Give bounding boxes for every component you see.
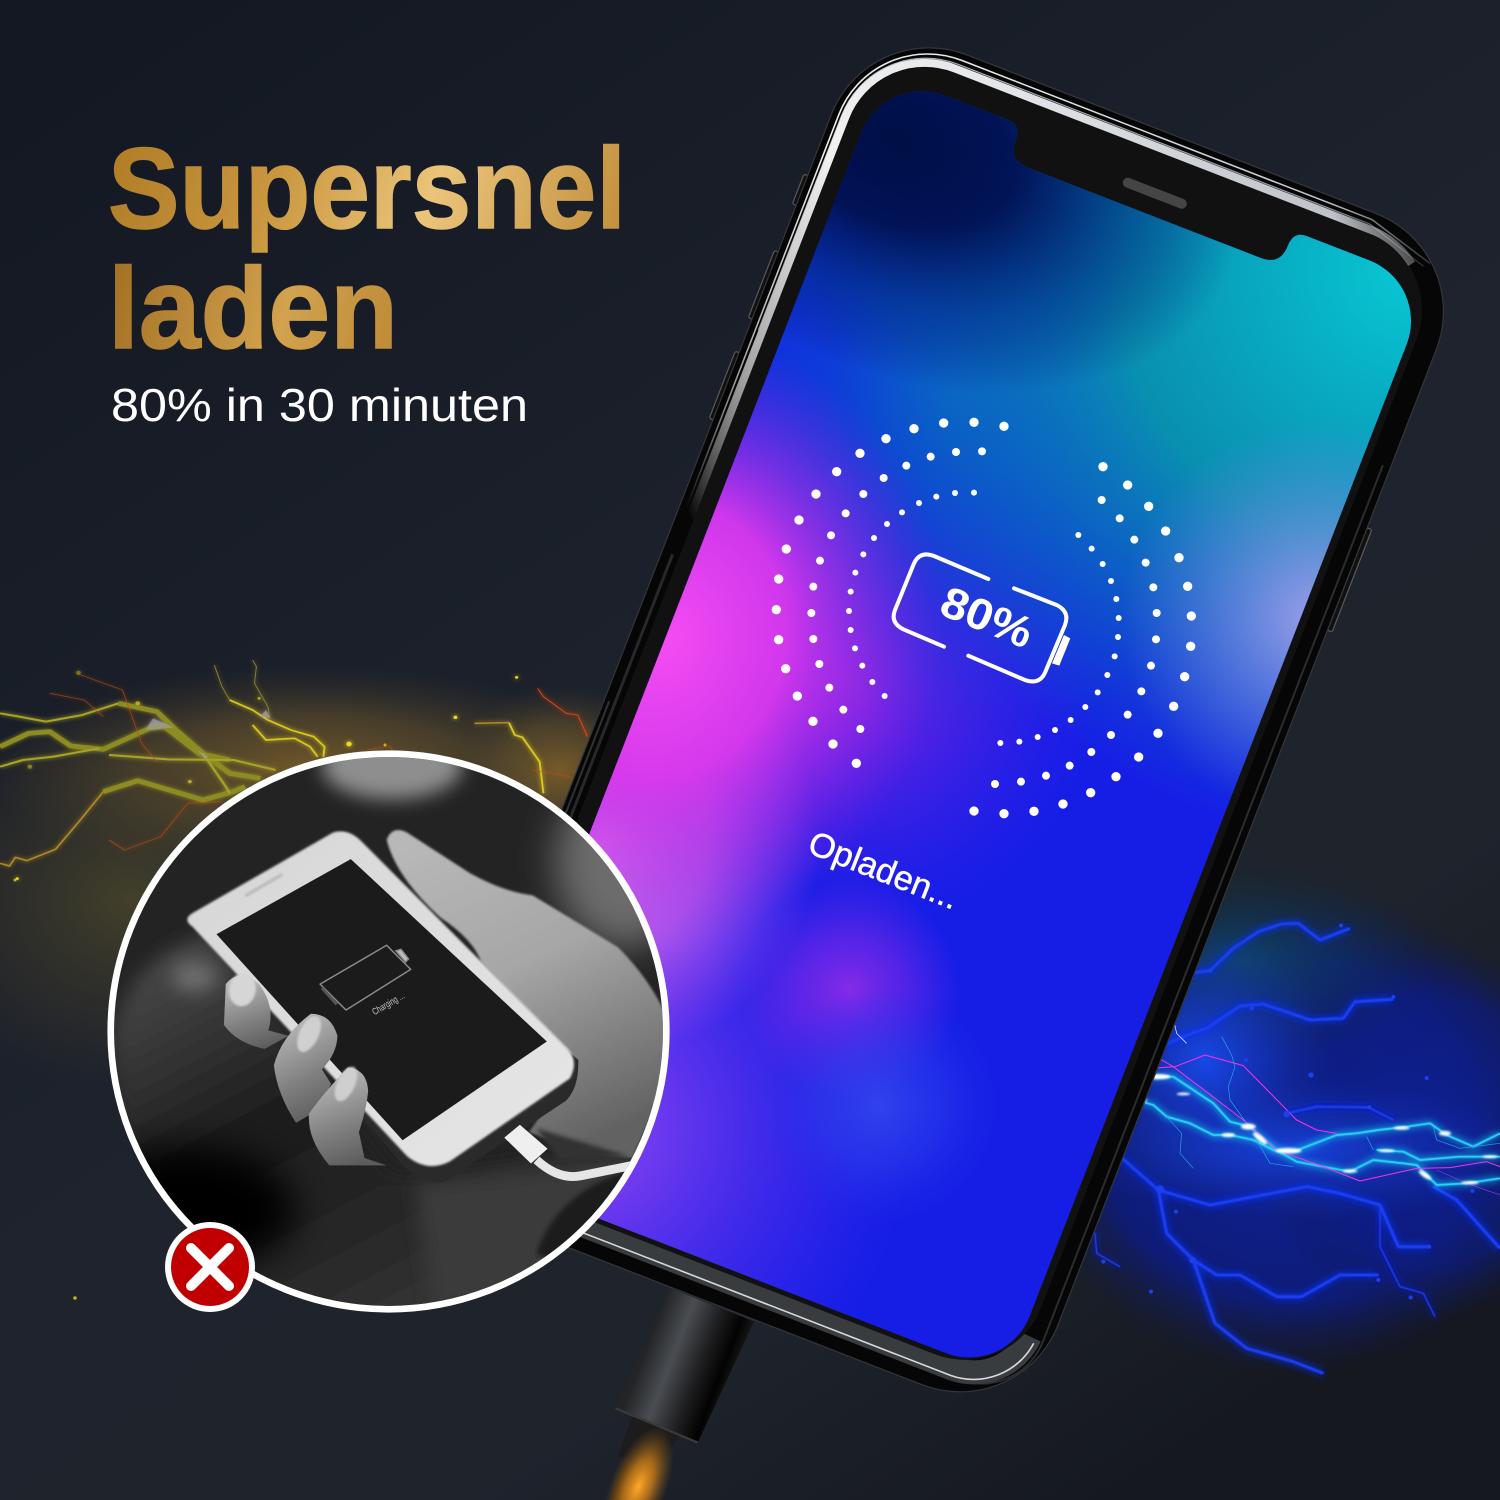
- fingers: [224, 971, 387, 1165]
- photo of phone in hand: [114, 757, 663, 1306]
- phone thin edge highlights: [426, 25, 1464, 1403]
- black case edge: [363, 1051, 578, 1170]
- small charging text: Charging ...: [370, 991, 407, 1018]
- phone: [411, 16, 1479, 1425]
- phone bezel: [444, 43, 1446, 1384]
- battery icon: [894, 554, 1070, 681]
- phone bottom metal band: [447, 1119, 1036, 1399]
- heading: laden: [108, 245, 398, 373]
- hand palm and thumb: [387, 830, 670, 1158]
- phone body: [415, 17, 1474, 1423]
- phone side buttons: [709, 174, 1417, 656]
- photo callout: ordinary charging: [107, 750, 670, 1313]
- yellow energy glow: [0, 665, 670, 1090]
- blue lightning: [1087, 923, 1500, 1373]
- heading: Supersnel: [108, 125, 626, 253]
- phone black screen: [217, 859, 547, 1140]
- heading: [108, 125, 626, 373]
- white charging cable: [504, 1125, 633, 1177]
- battery percentage: 80%: [934, 577, 1040, 658]
- blue energy glow: [1020, 860, 1500, 1375]
- phone silver rim: [690, 38, 1418, 728]
- charging label: Opladen...: [803, 824, 964, 917]
- earpiece: [246, 875, 281, 895]
- charging cable: [588, 1287, 754, 1500]
- red cross badge: [165, 1222, 255, 1312]
- charging progress dots: [772, 418, 1196, 818]
- subheading: 80% in 30 minuten: [111, 379, 528, 431]
- yellow lightning: [0, 660, 587, 880]
- white phone body: [187, 831, 574, 1166]
- phone speaker: [1121, 176, 1188, 210]
- phone screen: [586, 92, 1411, 1358]
- photo white ring: [111, 754, 666, 1309]
- stray sparks: [14, 744, 386, 1300]
- empty battery icon: [320, 945, 411, 1010]
